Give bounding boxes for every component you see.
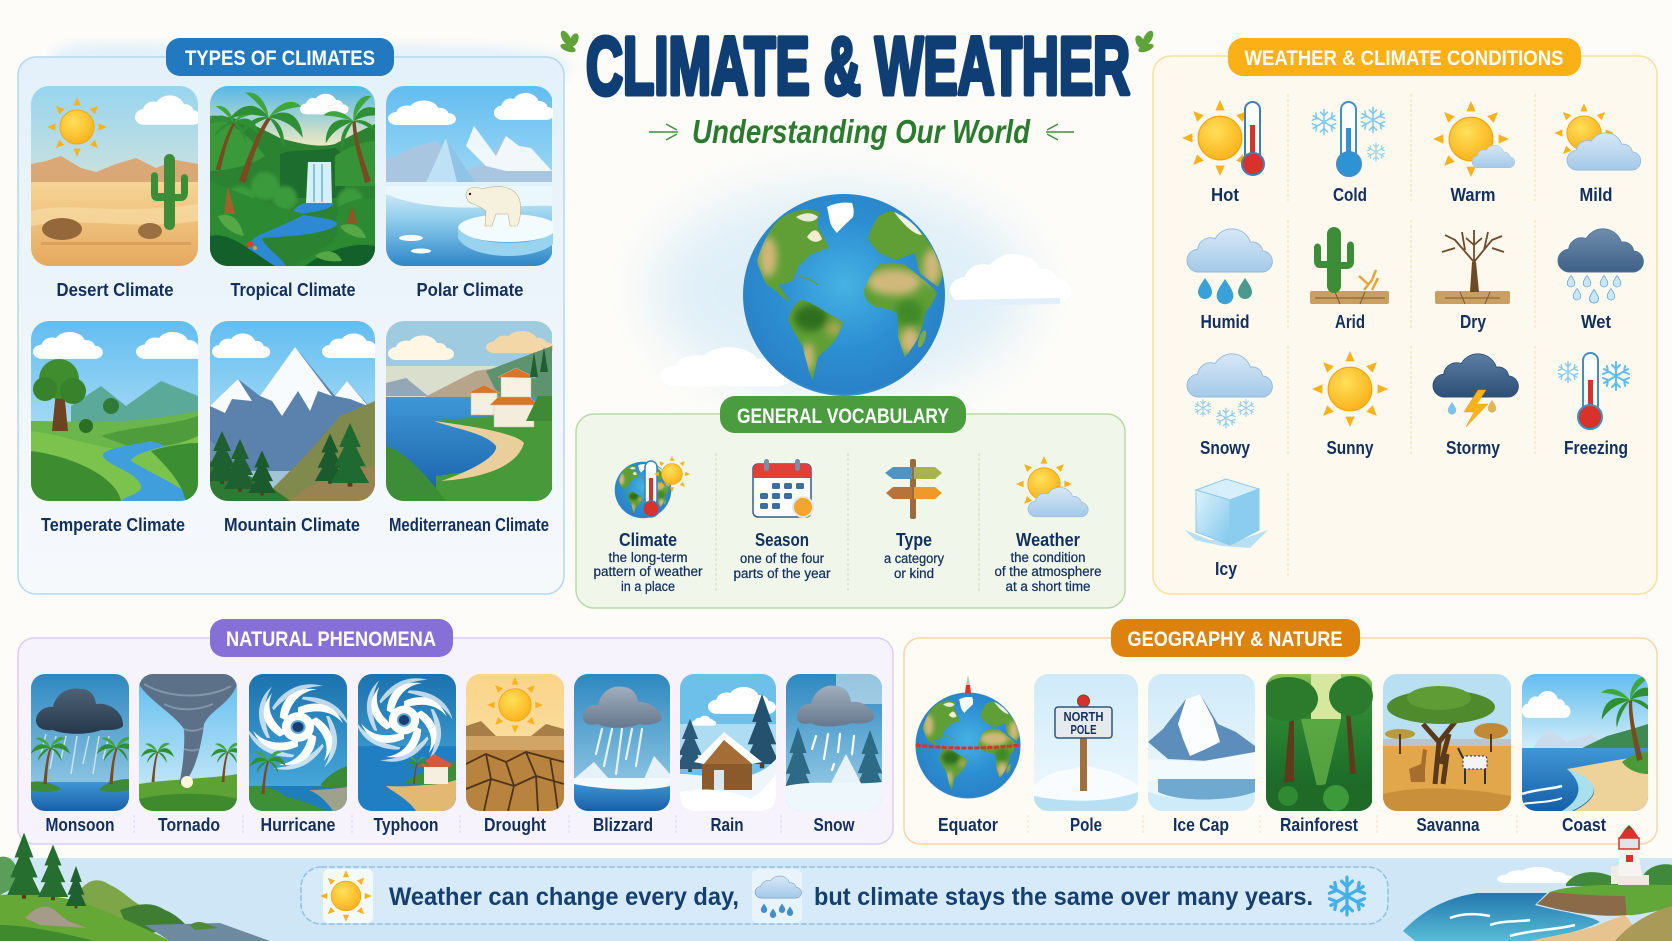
item: season: parts of the year bbox=[734, 566, 831, 581]
icon: dark cloud with rain bbox=[1558, 229, 1643, 303]
item: season bbox=[734, 459, 831, 581]
title: CLIMATE & WEATHER bbox=[586, 21, 1130, 112]
card: temperate climate: Temperate Climate bbox=[41, 515, 185, 535]
icon: signpost bbox=[885, 459, 942, 519]
item: arid bbox=[1310, 227, 1389, 332]
card: blizzard: Blizzard bbox=[593, 815, 653, 835]
item: type: Type bbox=[896, 530, 932, 550]
item: snowy bbox=[1187, 354, 1272, 458]
card: typhoon: Typhoon bbox=[374, 815, 438, 835]
icon: left leaves bbox=[559, 29, 581, 54]
item: stormy: Stormy bbox=[1446, 438, 1500, 458]
item: sunny: Sunny bbox=[1326, 438, 1374, 458]
card: drought: Drought bbox=[484, 815, 546, 835]
icon: thermometer and snowflakes bbox=[1312, 102, 1385, 176]
item: humid bbox=[1187, 229, 1272, 332]
card: savanna: Savanna bbox=[1416, 815, 1480, 835]
heading: general vocabulary: GENERAL VOCABULARY bbox=[737, 405, 949, 428]
card: hurricane: Hurricane bbox=[260, 815, 336, 835]
icon: snowflake bbox=[1329, 877, 1365, 915]
item: stormy bbox=[1433, 354, 1518, 458]
right landscape with lighthouse bbox=[1403, 825, 1672, 941]
card: pole: Pole bbox=[1070, 815, 1102, 835]
icon: cloud with drops bbox=[1187, 229, 1272, 304]
icon: sun bbox=[320, 869, 373, 923]
card: equator: Equator bbox=[938, 815, 998, 835]
card: rain scene bbox=[676, 674, 780, 835]
item: cold: Cold bbox=[1333, 185, 1367, 205]
item: freezing bbox=[1558, 353, 1629, 458]
heading: weather and climate conditions bbox=[1228, 38, 1581, 76]
card: tornado: Tornado bbox=[158, 815, 220, 835]
item: icy: Icy bbox=[1215, 559, 1237, 579]
icon: globe thermometer and sun bbox=[615, 456, 690, 518]
heading: natural phenomena: NATURAL PHENOMENA bbox=[226, 628, 436, 651]
subtitle right flourish bbox=[1046, 124, 1074, 140]
left landscape bbox=[0, 832, 270, 941]
item: snowy: Snowy bbox=[1200, 438, 1250, 458]
item: cold bbox=[1312, 102, 1385, 205]
subtitle left flourish bbox=[649, 124, 678, 140]
sign text: NORTH bbox=[1064, 710, 1104, 724]
item: dry bbox=[1435, 230, 1510, 332]
card: mediterranean climate bbox=[386, 321, 554, 535]
heading: natural phenomena bbox=[210, 619, 453, 657]
panel: weather and climate conditions bbox=[1153, 38, 1657, 594]
card: tropical climate bbox=[210, 86, 375, 300]
card: tropical climate: Tropical Climate bbox=[230, 280, 356, 300]
item: weather bbox=[994, 456, 1102, 594]
item: sunny bbox=[1312, 351, 1388, 458]
icon: right leaves bbox=[1133, 29, 1155, 54]
item: warm bbox=[1433, 101, 1515, 205]
item: wet: Wet bbox=[1581, 312, 1611, 332]
globe with clouds bbox=[650, 185, 1071, 396]
heading: geography and nature bbox=[1111, 619, 1360, 657]
card: mountain climate: Mountain Climate bbox=[224, 515, 360, 535]
item: type bbox=[884, 459, 944, 581]
card: monsoon: Monsoon bbox=[46, 815, 114, 835]
icon: lighthouse bbox=[1611, 825, 1649, 885]
icon: sun and thermometer bbox=[1182, 100, 1264, 176]
card: snow scene bbox=[783, 674, 885, 835]
card: pole bbox=[1034, 674, 1138, 835]
item: climate: in a place bbox=[621, 579, 675, 594]
card: drought bbox=[466, 674, 564, 835]
card: savanna bbox=[1383, 674, 1511, 835]
heading: weather and climate conditions: WEATHER & CLIMATE CONDITIONS bbox=[1244, 47, 1564, 70]
icon: sun behind cloud bbox=[1554, 103, 1641, 170]
text: weather changes: Weather can change every day, bbox=[389, 883, 739, 911]
title block bbox=[559, 21, 1155, 150]
icon: cloud with snow bbox=[1187, 354, 1272, 428]
item: hot bbox=[1182, 100, 1264, 205]
item: hot: Hot bbox=[1211, 185, 1239, 205]
item: climate bbox=[594, 456, 703, 594]
item: climate: pattern of weather bbox=[594, 564, 703, 579]
card: mediterranean climate: Mediterranean Climate bbox=[389, 515, 549, 535]
panel: general vocabulary bbox=[576, 396, 1125, 608]
item: mild bbox=[1554, 103, 1641, 205]
card: monsoon bbox=[31, 674, 136, 835]
icon: ice cube bbox=[1185, 479, 1268, 548]
item: humid: Humid bbox=[1200, 312, 1250, 332]
card: rainforest: Rainforest bbox=[1280, 815, 1358, 835]
panel: natural phenomena bbox=[18, 619, 893, 844]
icon: storm cloud with lightning bbox=[1433, 354, 1518, 427]
item: climate: the long-term bbox=[608, 550, 688, 565]
icon: rain cloud bbox=[752, 869, 802, 923]
item: season: Season bbox=[755, 530, 809, 550]
icon: cactus on cracked ground bbox=[1310, 227, 1389, 304]
item: freezing: Freezing bbox=[1564, 438, 1628, 458]
icon: calendar bbox=[753, 459, 813, 517]
card: typhoon bbox=[358, 674, 456, 835]
card: tornado bbox=[139, 674, 244, 835]
item: arid: Arid bbox=[1335, 312, 1365, 332]
card: snow scene: Snow bbox=[814, 815, 855, 835]
card: rain scene: Rain bbox=[710, 815, 744, 835]
panel: types of climates bbox=[18, 38, 566, 594]
heading: geography and nature: GEOGRAPHY & NATURE bbox=[1128, 628, 1342, 651]
card: ice cap: Ice Cap bbox=[1173, 815, 1229, 835]
sign text bbox=[1064, 712, 1103, 734]
item: weather: of the atmosphere bbox=[994, 564, 1102, 579]
item: type: or kind bbox=[894, 566, 934, 581]
card: ice cap bbox=[1148, 674, 1255, 835]
item: type: a category bbox=[884, 551, 944, 566]
heading: types of climates: TYPES OF CLIMATES bbox=[185, 47, 375, 70]
card: equator bbox=[915, 675, 1021, 835]
card: hurricane bbox=[249, 674, 347, 831]
text: climate stays: but climate stays the same over many years. bbox=[814, 883, 1313, 911]
icon: sun with small cloud bbox=[1433, 101, 1515, 177]
item: weather: the condition bbox=[1010, 550, 1086, 565]
card: blizzard bbox=[574, 674, 670, 835]
card: mountain climate bbox=[206, 321, 382, 535]
item: climate: Climate bbox=[619, 530, 677, 550]
item: mild: Mild bbox=[1580, 185, 1612, 205]
icon: sun behind cloud bbox=[1016, 456, 1088, 517]
icon: thermometer and snowflakes bbox=[1558, 353, 1629, 429]
footer band bbox=[0, 858, 1672, 941]
icon: sun bbox=[1312, 351, 1388, 427]
card: rainforest bbox=[1258, 674, 1373, 835]
card: coast bbox=[1522, 674, 1648, 831]
card: desert climate: Desert Climate bbox=[56, 280, 174, 300]
card: polar climate bbox=[386, 86, 558, 300]
heading: types of climates bbox=[166, 38, 394, 76]
footer message banner bbox=[301, 867, 1388, 924]
item: dry: Dry bbox=[1460, 312, 1486, 332]
icon: bare tree bbox=[1435, 230, 1510, 304]
item: weather: Weather bbox=[1016, 530, 1080, 550]
card: desert climate bbox=[31, 86, 201, 300]
sign text: POLE bbox=[1070, 723, 1096, 737]
card: temperate climate bbox=[31, 321, 206, 535]
item: warm: Warm bbox=[1450, 185, 1496, 205]
item: season: one of the four bbox=[740, 551, 824, 566]
subtitle: Understanding Our World bbox=[692, 113, 1031, 150]
item: icy bbox=[1185, 479, 1268, 579]
card: coast: Coast bbox=[1562, 815, 1606, 835]
item: wet bbox=[1558, 229, 1643, 332]
icon: globe with equator line bbox=[915, 675, 1021, 799]
item: weather: at a short time bbox=[1006, 579, 1090, 594]
panel: geography and nature bbox=[904, 619, 1672, 844]
card: polar climate: Polar Climate bbox=[416, 280, 524, 300]
heading: general vocabulary bbox=[720, 396, 966, 433]
